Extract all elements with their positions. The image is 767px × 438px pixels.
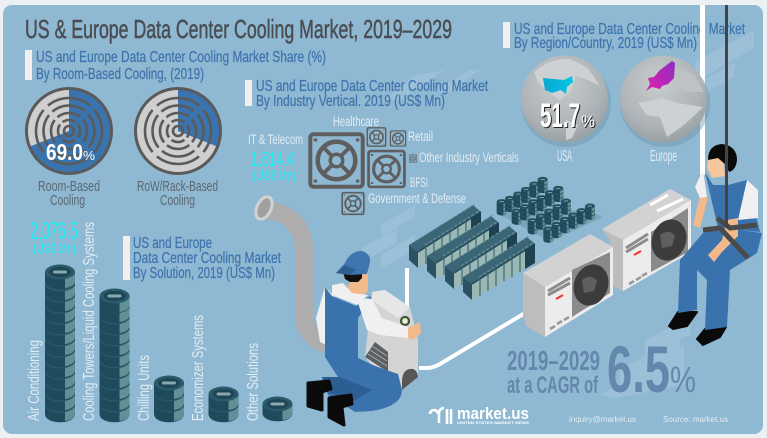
chart: stack air conditioning [45, 264, 75, 422]
worker pants [678, 227, 762, 330]
technician cap [336, 251, 370, 275]
globe: Europe [620, 56, 710, 147]
heading: by region: By Region/Country, 2019 (US$ Mn) [514, 35, 697, 52]
labels: industry verticals: BFSI [410, 175, 428, 190]
heading: by solution: Data Center Cooling Market [133, 250, 281, 267]
decorative watermark shapes [362, 30, 754, 398]
label: Europe: Europe [650, 148, 677, 165]
chart: room-based cooling fan gauge: % [83, 148, 95, 163]
chart: server rack rows [409, 204, 535, 300]
globe: USA: % [581, 112, 595, 131]
technician shirt [316, 287, 338, 345]
labels: solutions rotated: Cooling Towers/Liquid Cooling Systems [81, 222, 98, 421]
callout: CAGR: % [670, 359, 696, 400]
labels: industry verticals: Government & Defense [368, 191, 466, 206]
chart: rack-based cooling fan gauge [135, 88, 221, 174]
label: rack-based cooling: RoW/Rack-Based [137, 179, 218, 195]
footer: contact: inquiry@market.us [569, 415, 636, 424]
labels: industry verticals: IT & Telecom [248, 132, 303, 147]
heading: room-based cooling share: By Room-Based Cooling, (2019) [36, 66, 204, 83]
chart: room-based cooling fan gauge: 69.0 [46, 139, 83, 165]
technician neck and face [345, 270, 368, 302]
heading: room-based cooling share [25, 49, 326, 83]
value: air conditioning: 2,076.5 [30, 218, 78, 245]
technician collar [332, 283, 368, 305]
callout: CAGR [507, 332, 696, 406]
heading: industry vertical [245, 78, 488, 110]
callout: CAGR: at a CAGR of [507, 372, 599, 399]
heading: industry vertical: By Industry Vertical. 2019 (US$ Mn) [256, 93, 445, 110]
chart: stack cooling towers [100, 288, 130, 422]
chart: room-based cooling fan gauge [26, 88, 112, 174]
value: IT and telecom: 1,814.4 [251, 148, 294, 171]
logo: market.us [430, 404, 530, 425]
technician hand [408, 322, 421, 340]
worker sleeves [695, 170, 758, 220]
worker arms [693, 196, 738, 262]
labels: industry verticals: Other Industry Verticals [419, 150, 519, 165]
label: room-based cooling: Cooling [50, 193, 85, 209]
technician hair [343, 272, 362, 282]
value: IT and telecom [251, 148, 296, 183]
technician arm [358, 298, 408, 338]
icon: outdoor AC unit rear [602, 189, 692, 291]
globe: USA [521, 56, 611, 147]
labels: industry verticals: Retail [408, 129, 433, 144]
chart: industry vertical fan squares [310, 128, 417, 214]
value: IT and telecom: (US$ Mn) [253, 167, 296, 183]
title: US & Europe Data Center Cooling Market, 2019–2029 [25, 14, 452, 44]
worker shoes [669, 312, 726, 345]
heading: by solution [123, 235, 281, 282]
value: air conditioning [30, 218, 78, 256]
chart: stack other solutions [262, 396, 292, 421]
technician boots [308, 381, 352, 425]
worker hair [708, 144, 737, 172]
worker vest [705, 172, 760, 232]
technician overalls [322, 287, 402, 412]
illustration: suspended worker [669, 5, 762, 345]
heading: by solution: By Solution, 2019 (US$ Mn) [133, 265, 275, 282]
callout: CAGR: 2019–2029 [507, 345, 600, 376]
label: room-based cooling [38, 179, 100, 209]
icon: portable cooling unit [365, 290, 418, 390]
icon: grey duct pipe [253, 194, 326, 345]
heading: room-based cooling share: US and Europe Data Center Cooling Market Share (%) [36, 49, 326, 66]
labels: industry verticals: Healthcare [333, 114, 379, 129]
chart: stack economizer systems [208, 386, 238, 422]
worker face [707, 158, 725, 178]
worker harness [703, 218, 757, 258]
globe: USA: % [582, 113, 596, 132]
globe: USA: 51.7 [541, 98, 581, 136]
heading: by solution: US and Europe [133, 235, 212, 252]
label: rack-based cooling [137, 179, 218, 209]
globe: USA: 51.7 [540, 97, 580, 135]
labels: industry verticals [248, 114, 519, 206]
illustration: kneeling technician [308, 251, 421, 425]
labels: solutions rotated: Chilling Units [136, 355, 153, 421]
footer: source: Source: market.us [663, 415, 728, 424]
worker rope [725, 5, 728, 227]
labels: solutions rotated: Other Solutions [245, 343, 262, 421]
white pipe vertical [700, 5, 705, 175]
white coolant lines [407, 268, 525, 368]
label: rack-based cooling: Cooling [160, 193, 195, 209]
callout: CAGR: 6.5 [607, 332, 670, 406]
logo: market.us: market.us [457, 404, 529, 423]
icon: outdoor AC unit front [523, 234, 614, 337]
technician shadow [322, 377, 372, 402]
labels: solutions rotated: Air Conditioning [26, 340, 43, 421]
value: air conditioning: (US$ Mn) [33, 240, 76, 256]
chart: stack chilling units [154, 376, 184, 422]
chart: small disk stacks [497, 177, 603, 243]
label: room-based cooling: Room-Based [38, 179, 100, 195]
heading: industry vertical: US and Europe Data Center Cooling Market [256, 78, 488, 95]
logo: market.us: UNITED STATES MARKET NEWS [457, 421, 530, 425]
text: USA [557, 148, 572, 165]
heading: by region [503, 21, 745, 52]
labels: solutions rotated: Economizer Systems [190, 315, 207, 421]
labels: solutions rotated [26, 222, 262, 421]
